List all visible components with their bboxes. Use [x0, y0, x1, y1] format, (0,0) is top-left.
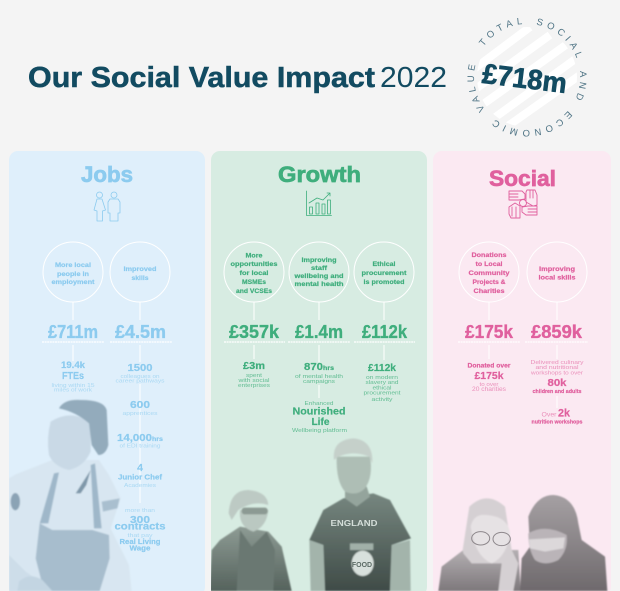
- growth photo: two workers: [210, 438, 411, 591]
- social stats column two: [530, 360, 584, 426]
- badge ring text: TOTAL SOCIAL AND ECONOMIC VALUE: [467, 18, 587, 136]
- social circle: donations: Community: [468, 270, 510, 277]
- growth stats column two: [292, 361, 347, 434]
- jobs stats column two: apprentices: [122, 411, 158, 417]
- social circle: donations: [459, 242, 519, 302]
- growth stats column one: spent: [246, 373, 262, 379]
- social stats column two: nutrition workshops: [532, 420, 582, 426]
- jobs amounts: £711m: [48, 322, 98, 342]
- social stats column two: children and adults: [532, 389, 582, 395]
- growth circle: wellbeing: [289, 242, 349, 302]
- growth circle: wellbeing: Improving: [302, 257, 337, 264]
- jobs circle: more local people: people in: [57, 271, 89, 278]
- title: Our Social Value Impact: [28, 62, 375, 94]
- jobs circle: more local people: [43, 242, 103, 302]
- growth stats column two: of mental health: [295, 374, 343, 380]
- social circle: donations: Projects &: [472, 279, 506, 286]
- jobs stats column two: contracts: [114, 522, 166, 532]
- growth amounts: £357k: [229, 322, 280, 342]
- jobs stats column two: Academies: [124, 483, 156, 489]
- jobs stats column two: 600: [130, 399, 150, 411]
- jobs amounts: [48, 322, 166, 342]
- growth stats column three: procurement: [364, 390, 401, 396]
- growth circle: wellbeing: wellbeing and: [293, 273, 344, 280]
- growth photo shirt text: ENGLAND: [330, 519, 378, 528]
- jobs circle: more local people: employment: [52, 279, 95, 286]
- growth stats column three: activity: [372, 397, 393, 403]
- growth circle: ethical procurement: [354, 242, 414, 302]
- growth circle: opportunities: More: [246, 252, 263, 260]
- social connector lines: [458, 302, 588, 408]
- growth photo shirt text: [330, 519, 378, 569]
- jobs stats column two: [114, 363, 166, 552]
- social photo: two students: [438, 495, 607, 591]
- social stats column one: Donated over: [468, 362, 511, 370]
- growth stats column three: £112k: [368, 363, 396, 374]
- social heading: Social: [489, 166, 556, 191]
- growth circle: wellbeing: mental health: [294, 281, 344, 288]
- growth photo shirt text: FOOD: [352, 562, 372, 569]
- growth amounts: £112k: [362, 322, 408, 342]
- growth circle: opportunities: [224, 242, 284, 302]
- social circle: donations: to Local: [476, 261, 503, 268]
- growth amounts: [229, 322, 408, 342]
- growth stats column three: [364, 363, 401, 403]
- growth stats column one: with social: [237, 378, 270, 384]
- icon: joined hands: [509, 190, 537, 218]
- jobs stats column two: 14,000 hrs: [117, 432, 163, 444]
- social stats column two: 2k: [558, 408, 571, 420]
- jobs heading: Jobs: [81, 162, 133, 187]
- social stats column one: £175k: [474, 371, 504, 382]
- social amounts: £175k: [465, 322, 514, 342]
- growth circle: opportunities: for local: [240, 270, 269, 277]
- jobs stats column two: Wage: [130, 544, 150, 552]
- panel: social: [433, 151, 611, 591]
- jobs stats column one: miles of work: [54, 388, 92, 394]
- social circle: donations: Charities: [474, 288, 505, 295]
- growth circle: ethical procurement: Ethical: [372, 261, 396, 268]
- jobs stats column two: 4: [137, 462, 143, 474]
- social stats column one: [468, 362, 511, 393]
- jobs stats column two: that pay: [128, 533, 153, 539]
- jobs amounts: £4.5m: [115, 322, 166, 342]
- social amounts: £859k: [531, 322, 583, 342]
- social stats column two: 80k: [548, 378, 567, 389]
- growth amounts: £1.4m: [295, 322, 343, 342]
- growth connector lines: [224, 302, 415, 398]
- growth circle: ethical procurement: procurement: [362, 270, 407, 277]
- jobs stats column two: career pathways: [116, 378, 165, 384]
- panel: growth: [210, 151, 427, 591]
- panel: jobs: [9, 151, 205, 591]
- growth circle: ethical procurement: is promoted: [364, 279, 405, 286]
- growth stats column three: ethical: [372, 386, 392, 392]
- growth stats column three: slavery and: [366, 380, 398, 386]
- growth stats column two: 870hrs: [304, 361, 334, 373]
- social stats column two: and nutritional: [536, 365, 578, 371]
- growth stats column two: Enhanced: [304, 401, 334, 407]
- growth stats column one: enterprises: [238, 383, 270, 389]
- jobs stats column two: 1500: [128, 363, 153, 374]
- icon: two people: [94, 192, 120, 221]
- jobs connector lines: [42, 302, 172, 503]
- jobs stats column one: 19.4k: [61, 360, 86, 371]
- jobs stats column two: more than: [125, 508, 155, 514]
- growth stats column two: Life: [312, 416, 330, 428]
- growth circle: wellbeing: staff: [311, 265, 328, 272]
- growth stats column one: [237, 361, 270, 389]
- badge amount: £718m: [480, 58, 569, 99]
- badge: total value: [467, 18, 587, 136]
- jobs circle: more local people: More local: [55, 262, 91, 269]
- jobs stats column two: 300: [130, 514, 150, 526]
- jobs circle: improved skills: [110, 242, 170, 302]
- social circle: local skills: [527, 242, 587, 302]
- jobs photo: chef: [9, 400, 132, 591]
- jobs stats column two: colleagues on: [120, 374, 160, 380]
- social stats column two: Over: [542, 412, 557, 418]
- social stats column one: to over: [480, 382, 499, 388]
- jobs circle: improved skills: Improved: [124, 266, 157, 273]
- jobs stats column one: FTEs: [62, 371, 84, 382]
- growth stats column three: on modern: [366, 375, 398, 381]
- jobs stats column two: Real Living: [120, 537, 161, 546]
- jobs stats column one: living within 15: [52, 383, 94, 389]
- growth stats column two: Nourished: [292, 406, 346, 418]
- icon: bar chart: [306, 191, 332, 216]
- jobs circle: improved skills: skills: [132, 275, 149, 282]
- social stats column two: workshops to over: [530, 370, 583, 376]
- social amounts: [465, 322, 583, 342]
- growth circle: opportunities: opportunities: [230, 261, 278, 268]
- jobs stats column two: of EDI training: [120, 444, 160, 450]
- social circle: donations: Donations: [472, 252, 507, 259]
- jobs stats column two: Junior Chef: [118, 472, 163, 482]
- growth heading: Growth: [278, 162, 361, 187]
- jobs stats column one: [52, 360, 94, 394]
- growth circle: opportunities: and VCSEs: [236, 288, 272, 295]
- social circle: local skills: local skills: [538, 274, 576, 282]
- growth stats column one: £3m: [243, 361, 265, 372]
- title: 2022: [380, 62, 447, 94]
- growth circle: opportunities: MSMEs: [242, 279, 266, 286]
- social stats column one: 20 charities: [472, 387, 506, 393]
- social stats column two: Delivered culinary: [530, 360, 584, 366]
- growth stats column two: campaigns: [303, 379, 335, 385]
- social circle: local skills: Improving: [539, 266, 575, 273]
- growth stats column two: Wellbeing platform: [292, 428, 347, 434]
